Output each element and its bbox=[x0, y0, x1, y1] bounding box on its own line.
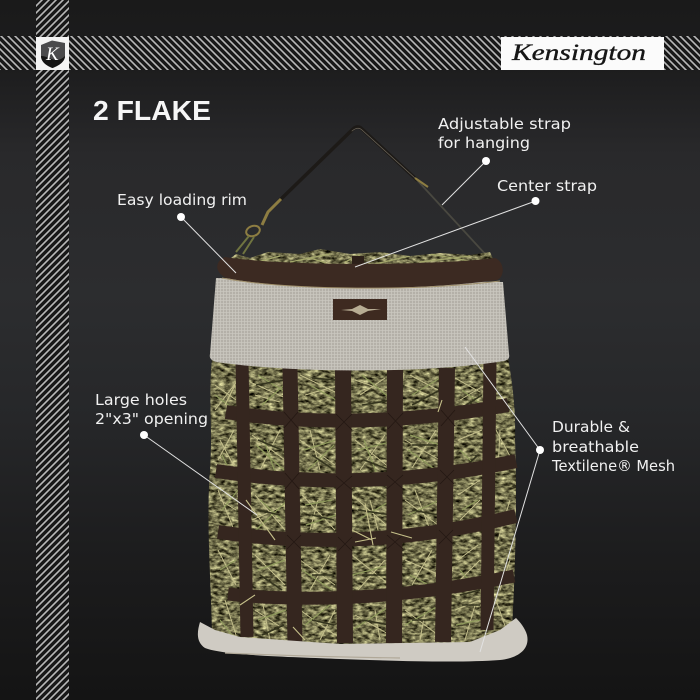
callout: center strap bbox=[355, 177, 597, 267]
padded rim bbox=[217, 257, 503, 288]
callout: adjustable strap: for hanging bbox=[438, 134, 530, 152]
product: hay bag bbox=[198, 127, 528, 662]
logo: Kensington wordmark bbox=[501, 37, 664, 70]
title: 2 FLAKE bbox=[93, 95, 211, 126]
icon: K shield logo: K bbox=[45, 44, 60, 65]
callout: large holes: Large holes bbox=[95, 391, 187, 409]
callout: textilene mesh bbox=[465, 347, 675, 652]
brand tag bbox=[333, 299, 387, 320]
panel: striped vertical band bbox=[36, 70, 69, 700]
callout: adjustable strap: Adjustable strap bbox=[438, 115, 571, 133]
callout: textilene mesh: breathable bbox=[552, 438, 639, 456]
strap stitching bbox=[284, 410, 455, 551]
hay showing at top bbox=[231, 249, 493, 264]
hanging strap bbox=[280, 127, 487, 256]
panel: striped header band bbox=[0, 0, 700, 70]
logo: Kensington wordmark: Kensington bbox=[511, 40, 646, 65]
callout: adjustable strap bbox=[438, 115, 571, 205]
callout: textilene mesh: Durable & bbox=[552, 418, 630, 436]
callout: center strap: Center strap bbox=[497, 177, 597, 195]
mesh top panel bbox=[210, 278, 509, 371]
callout: easy loading rim: Easy loading rim bbox=[117, 191, 247, 209]
callout: large holes bbox=[95, 391, 257, 515]
bottom cuff bbox=[198, 618, 528, 662]
callout: textilene mesh: Textilene® Mesh bbox=[551, 457, 675, 475]
brass snap clip bbox=[236, 178, 428, 254]
hay body with noise texture bbox=[205, 355, 520, 650]
callout: large holes: 2"x3" opening bbox=[95, 410, 208, 428]
stray hay over straps bbox=[225, 385, 442, 640]
callout: easy loading rim bbox=[117, 191, 247, 273]
net straps bbox=[216, 360, 516, 643]
icon: K shield logo bbox=[36, 37, 69, 70]
